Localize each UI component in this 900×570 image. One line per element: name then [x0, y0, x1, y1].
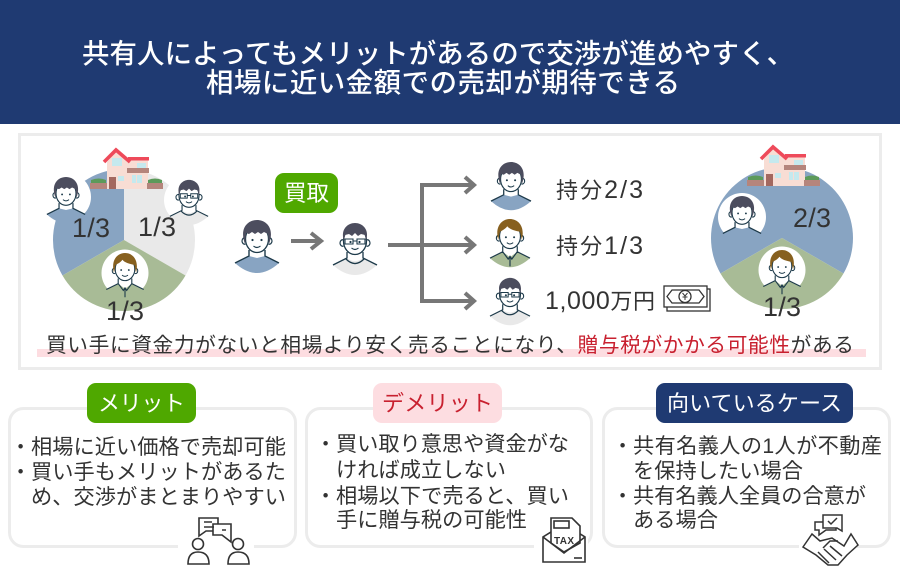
share label 1/3: 1/3	[763, 292, 801, 322]
demerit text: 手に贈与税の可能性	[336, 508, 527, 532]
icon: handshake	[799, 515, 858, 565]
demerit badge: デメリット	[382, 391, 493, 416]
demerit text: ・	[315, 485, 336, 508]
title banner	[0, 0, 900, 124]
title text: 共有人によってもメリットがあるので交渉が進めやすく、	[82, 38, 794, 69]
demerit text: 買い取り意思や資金がな	[336, 432, 569, 456]
recipient row: owner share 1/3: 持分1/3	[556, 232, 643, 260]
highlight note: 買い手に資金力がないと相場より安く売ることになり、贈与税がかかる可能性がある	[46, 334, 854, 357]
arrow: sale to buyer	[291, 233, 321, 249]
panel: demerits	[306, 383, 592, 565]
icon: buyer	[333, 223, 377, 275]
share label 2/3: 2/3	[793, 203, 831, 233]
merit text: 買い手もメリットがあるた	[31, 460, 286, 484]
buyout badge	[275, 173, 338, 213]
merit text: 相場に近い価格で売却可能	[31, 435, 286, 459]
merit text: ・	[10, 461, 31, 484]
icon: seller on pie	[47, 177, 85, 223]
suitable cases text: 共有名義人の1人が不動産	[633, 434, 882, 458]
suitable cases text	[612, 434, 882, 532]
suitable cases text: 共有名義人全員の合意が	[633, 484, 866, 508]
panel: merits	[10, 383, 296, 570]
suitable cases text: を保持したい場合	[633, 459, 803, 483]
icon: seller	[235, 220, 279, 273]
icon: buyer on pie	[170, 180, 208, 225]
suitable cases text: ある場合	[633, 508, 718, 532]
merit text	[10, 435, 286, 509]
pie chart: before, three equal shares	[43, 150, 212, 326]
icon: owner with 2/3	[723, 196, 761, 242]
merit text: ・	[10, 436, 31, 459]
buyout badge: 買取	[284, 181, 329, 206]
recipient row: 10 million yen: 1,000万円	[545, 287, 655, 315]
icon: conversation	[178, 510, 254, 570]
demerit text: 相場以下で売ると、買い	[336, 484, 569, 508]
arrow: distribution branches	[388, 177, 474, 309]
share label bottom: 1/3	[106, 296, 144, 326]
pie chart: after buyout	[711, 147, 853, 322]
icon: owner with 1/3	[763, 250, 801, 295]
icon: tax envelope	[534, 515, 588, 565]
icon: tax envelope: TAX	[554, 536, 574, 547]
recipient row: owner share 2/3	[491, 162, 643, 210]
suitable cases badge	[656, 383, 853, 423]
suitable cases text: ・	[612, 485, 633, 508]
demerit text	[315, 432, 569, 532]
icon: co-owner on pie	[106, 253, 144, 298]
share label left: 1/3	[72, 213, 110, 243]
demerit badge	[373, 383, 502, 423]
merit text: め、交渉がまとまりやすい	[31, 485, 286, 509]
recipient row: owner share 1/3	[490, 219, 643, 267]
icon: banknotes	[664, 286, 710, 311]
title text	[82, 38, 794, 98]
merit badge: メリット	[98, 391, 185, 416]
demerit text: ・	[315, 433, 336, 456]
demerit text: ければ成立しない	[336, 458, 506, 482]
icon: house	[747, 147, 820, 186]
title text: 相場に近い金額での売却が期待できる	[206, 67, 680, 98]
suitable cases badge: 向いているケース	[667, 391, 842, 416]
suitable cases text: ・	[612, 435, 633, 458]
merit badge	[87, 383, 196, 423]
icon: house	[90, 150, 163, 189]
share label right: 1/3	[138, 212, 176, 242]
panel: buyout diagram	[20, 134, 880, 368]
panel: suitable cases	[604, 383, 890, 565]
recipient row: 10 million yen	[490, 278, 710, 325]
recipient row: owner share 2/3: 持分2/3	[556, 176, 643, 204]
